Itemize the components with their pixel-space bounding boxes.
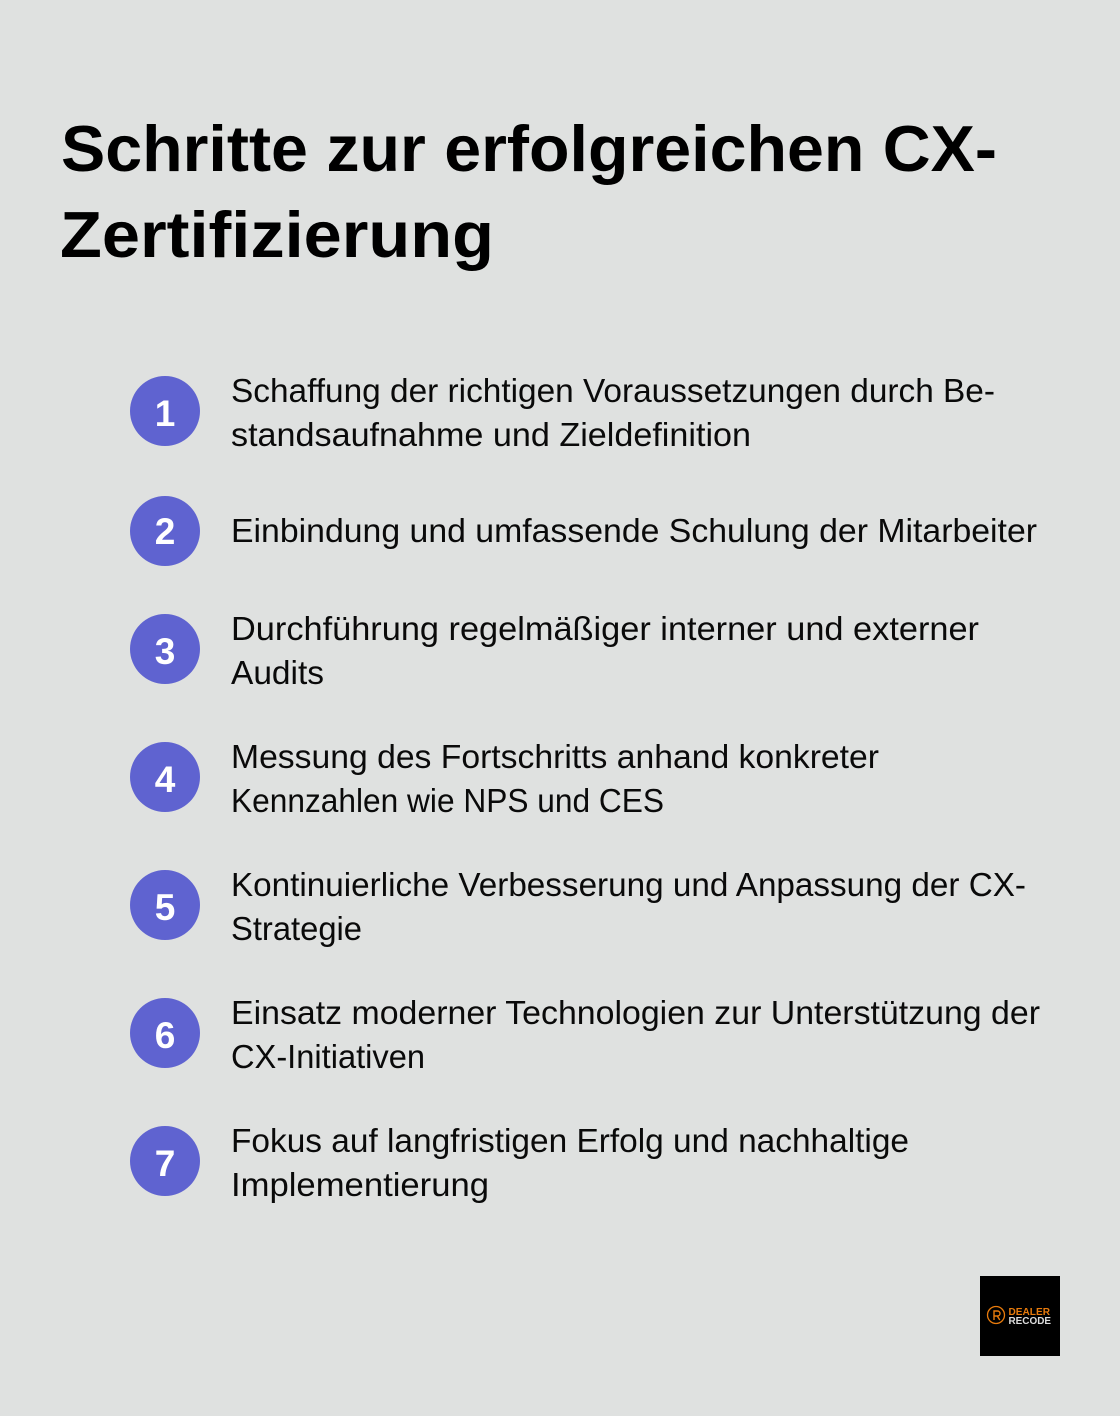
title: Schritte zur erfolgreichen CX- — [61, 112, 997, 185]
step 2 — [130, 496, 1037, 566]
logo: Dealer Recode — [980, 1276, 1060, 1356]
step 4 — [130, 738, 879, 819]
step 1 text: Schaffung der richtigen Voraussetzungen durch Be- — [231, 372, 995, 409]
step 3 text: Durchführung regelmäßiger interner und externer — [231, 610, 979, 647]
step 1 — [130, 372, 995, 453]
step 7 text: Fokus auf langfristigen Erfolg und nachhaltige — [231, 1122, 909, 1159]
step 4 text — [231, 738, 879, 819]
step 7 — [130, 1122, 909, 1203]
number badge 7: 7 — [155, 1143, 175, 1184]
number badge 7 — [130, 1126, 200, 1196]
number badge 2 — [130, 496, 200, 566]
number badge 5: 5 — [155, 887, 175, 928]
number badge 4 — [130, 742, 200, 812]
step 4 text: Messung des Fortschritts anhand konkreter — [231, 738, 879, 775]
step 5 text — [231, 866, 1026, 947]
logo: Dealer Recode: DEALER — [1008, 1306, 1050, 1318]
step 6 text: Einsatz moderner Technologien zur Unterstützung der — [231, 994, 1040, 1031]
number badge 1 — [130, 376, 200, 446]
number badge 6: 6 — [155, 1015, 175, 1056]
step 1 text: standsaufnahme und Zieldefinition — [231, 416, 751, 453]
step 3 text: Audits — [231, 654, 324, 691]
number badge 6 — [130, 998, 200, 1068]
step 5 — [130, 866, 1026, 947]
step 6 text — [231, 994, 1040, 1075]
step 5 text: Kontinuierliche Verbesserung und Anpassung der CX- — [231, 866, 1026, 903]
number badge 1: 1 — [155, 393, 175, 434]
logo: Dealer Recode: RECODE — [1008, 1315, 1051, 1327]
step 7 text — [231, 1122, 909, 1203]
step 3 — [130, 610, 979, 691]
step 1 text — [231, 372, 995, 453]
step 2 text: Einbindung und umfassende Schulung der Mitarbeiter — [231, 512, 1037, 549]
step 5 text: Strategie — [231, 910, 362, 947]
title: Zertifizierung — [60, 198, 494, 271]
title — [60, 112, 997, 271]
number badge 3: 3 — [155, 631, 175, 672]
step 6 — [130, 994, 1040, 1075]
number badge 2: 2 — [155, 511, 175, 552]
step 4 text: Kennzahlen wie NPS und CES — [231, 782, 664, 819]
number badge 3 — [130, 614, 200, 684]
step 7 text: Implementierung — [231, 1166, 489, 1203]
step 6 text: CX-Initiativen — [231, 1038, 425, 1075]
number badge 5 — [130, 870, 200, 940]
step 3 text — [231, 610, 979, 691]
number badge 4: 4 — [155, 759, 176, 800]
